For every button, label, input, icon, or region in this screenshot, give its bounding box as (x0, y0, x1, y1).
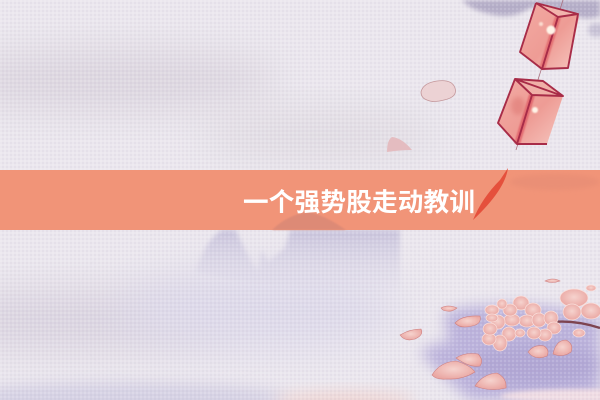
branch (553, 322, 600, 328)
distant mountains (196, 230, 400, 292)
clouds top right (462, 0, 600, 37)
upper lantern (520, 3, 579, 69)
lavender wash bottom right (420, 304, 600, 400)
hanging string (516, 0, 563, 150)
floating petal middle (387, 137, 412, 152)
floating petal upper (421, 81, 456, 102)
fallen petals (400, 279, 572, 390)
blossoms (482, 285, 600, 351)
tassel (473, 168, 508, 220)
title: 一个强势股走动教训 (243, 188, 475, 217)
lower lantern (498, 79, 563, 144)
banner strip (0, 170, 600, 230)
